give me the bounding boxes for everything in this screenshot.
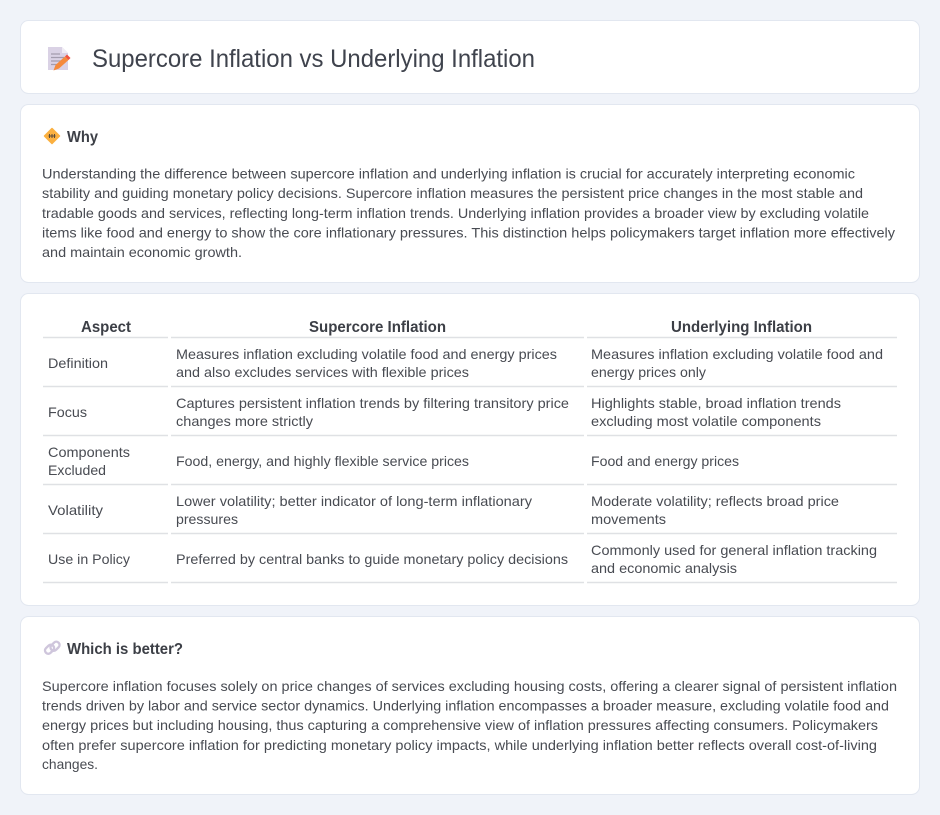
panel: comparison table xyxy=(20,294,920,606)
table row: definition xyxy=(48,346,883,380)
table row: volatility: Lower volatility; better indicator of long-term inflationary xyxy=(176,493,532,509)
heading: which is better: Which is better? xyxy=(67,641,183,658)
table row: components excluded: Food and energy prices xyxy=(591,453,739,469)
text block: which is better paragraph: energy prices but including housing, thus capturing a comprehensive view of inflation pressures affecting consumers. Policymakers xyxy=(42,717,878,733)
text block: which is better paragraph: Supercore inflation focuses solely on price changes of services excluding housing costs, offering a clearer signal of persistent inflation xyxy=(42,678,897,694)
panel: which is better xyxy=(20,616,920,794)
table row: use in policy: Use in Policy xyxy=(48,551,130,567)
table row: definition: Measures inflation excluding volatile food and xyxy=(591,346,883,362)
table row: definition: Measures inflation excluding volatile food and energy prices xyxy=(176,346,557,362)
table row: focus xyxy=(48,395,841,429)
heading: why: Why xyxy=(67,129,98,146)
table row: focus: changes more strictly xyxy=(176,413,313,429)
table row: components excluded: Excluded xyxy=(48,462,106,478)
text block: which is better paragraph: trends driven by labor and service sector dynamics. Underlying inflation encompasses a broader measure, excluding volatile food and xyxy=(42,698,889,714)
text block: why paragraph: tradable goods and services, reflecting long-term inflation trends. Underlying inflation provides a broader view by excluding volatile xyxy=(42,205,869,221)
table header row: Supercore Inflation xyxy=(309,319,446,336)
icon: memo with pencil xyxy=(48,47,70,70)
table row: focus: Captures persistent inflation trends by filtering transitory price xyxy=(176,395,569,411)
table row: definition: Definition xyxy=(48,355,108,371)
table row: volatility: Volatility xyxy=(48,502,103,518)
table row: focus: Focus xyxy=(48,404,87,420)
text block: why paragraph: stability and guiding monetary policy decisions. Supercore inflation measures the persistent price changes in the most stable and xyxy=(42,185,863,201)
table row: volatility: Moderate volatility; reflects broad price xyxy=(591,493,839,509)
table row: components excluded xyxy=(48,444,739,478)
text block: which is better paragraph: often prefer supercore inflation for predicting monetary policy impacts, while underlying inflation better reflects overall cost-of-living xyxy=(42,737,877,753)
table row: components excluded: Components xyxy=(48,444,130,460)
icon: warning diamond xyxy=(44,128,60,144)
text block: why paragraph: Understanding the difference between supercore inflation and underlying inflation is crucial for accurately interpreting economic xyxy=(42,166,855,182)
table row: volatility xyxy=(48,493,839,527)
text block: why paragraph: and maintain economic growth. xyxy=(42,244,242,260)
text block: why paragraph xyxy=(42,166,895,260)
table row: use in policy: and economic analysis xyxy=(591,560,737,576)
icon: link xyxy=(44,640,61,655)
title: Supercore Inflation vs Underlying Inflation xyxy=(92,45,535,73)
table row: components excluded: Food, energy, and highly flexible service prices xyxy=(176,453,469,469)
table row: definition: and also excludes services with flexible prices xyxy=(176,364,469,380)
panel: title header xyxy=(20,20,920,94)
table row: focus: excluding most volatile components xyxy=(591,413,821,429)
table row: definition: energy prices only xyxy=(591,364,706,380)
table row: use in policy: Commonly used for general inflation tracking xyxy=(591,542,877,558)
table row: use in policy xyxy=(48,542,877,576)
text block: which is better paragraph xyxy=(42,678,897,772)
text block: which is better paragraph: changes. xyxy=(42,756,98,772)
text block: why paragraph: items like food and energy to show the core inflationary pressures. This distinction helps policymakers target inflation more effectively xyxy=(42,224,895,240)
table header row: Underlying Inflation xyxy=(671,319,812,336)
table header row xyxy=(81,319,812,336)
table header row: Aspect xyxy=(81,319,132,336)
table row: focus: Highlights stable, broad inflation trends xyxy=(591,395,841,411)
table row: use in policy: Preferred by central banks to guide monetary policy decisions xyxy=(176,551,568,567)
table row: volatility: movements xyxy=(591,511,666,527)
table row: volatility: pressures xyxy=(176,511,238,527)
panel: why xyxy=(20,104,920,282)
